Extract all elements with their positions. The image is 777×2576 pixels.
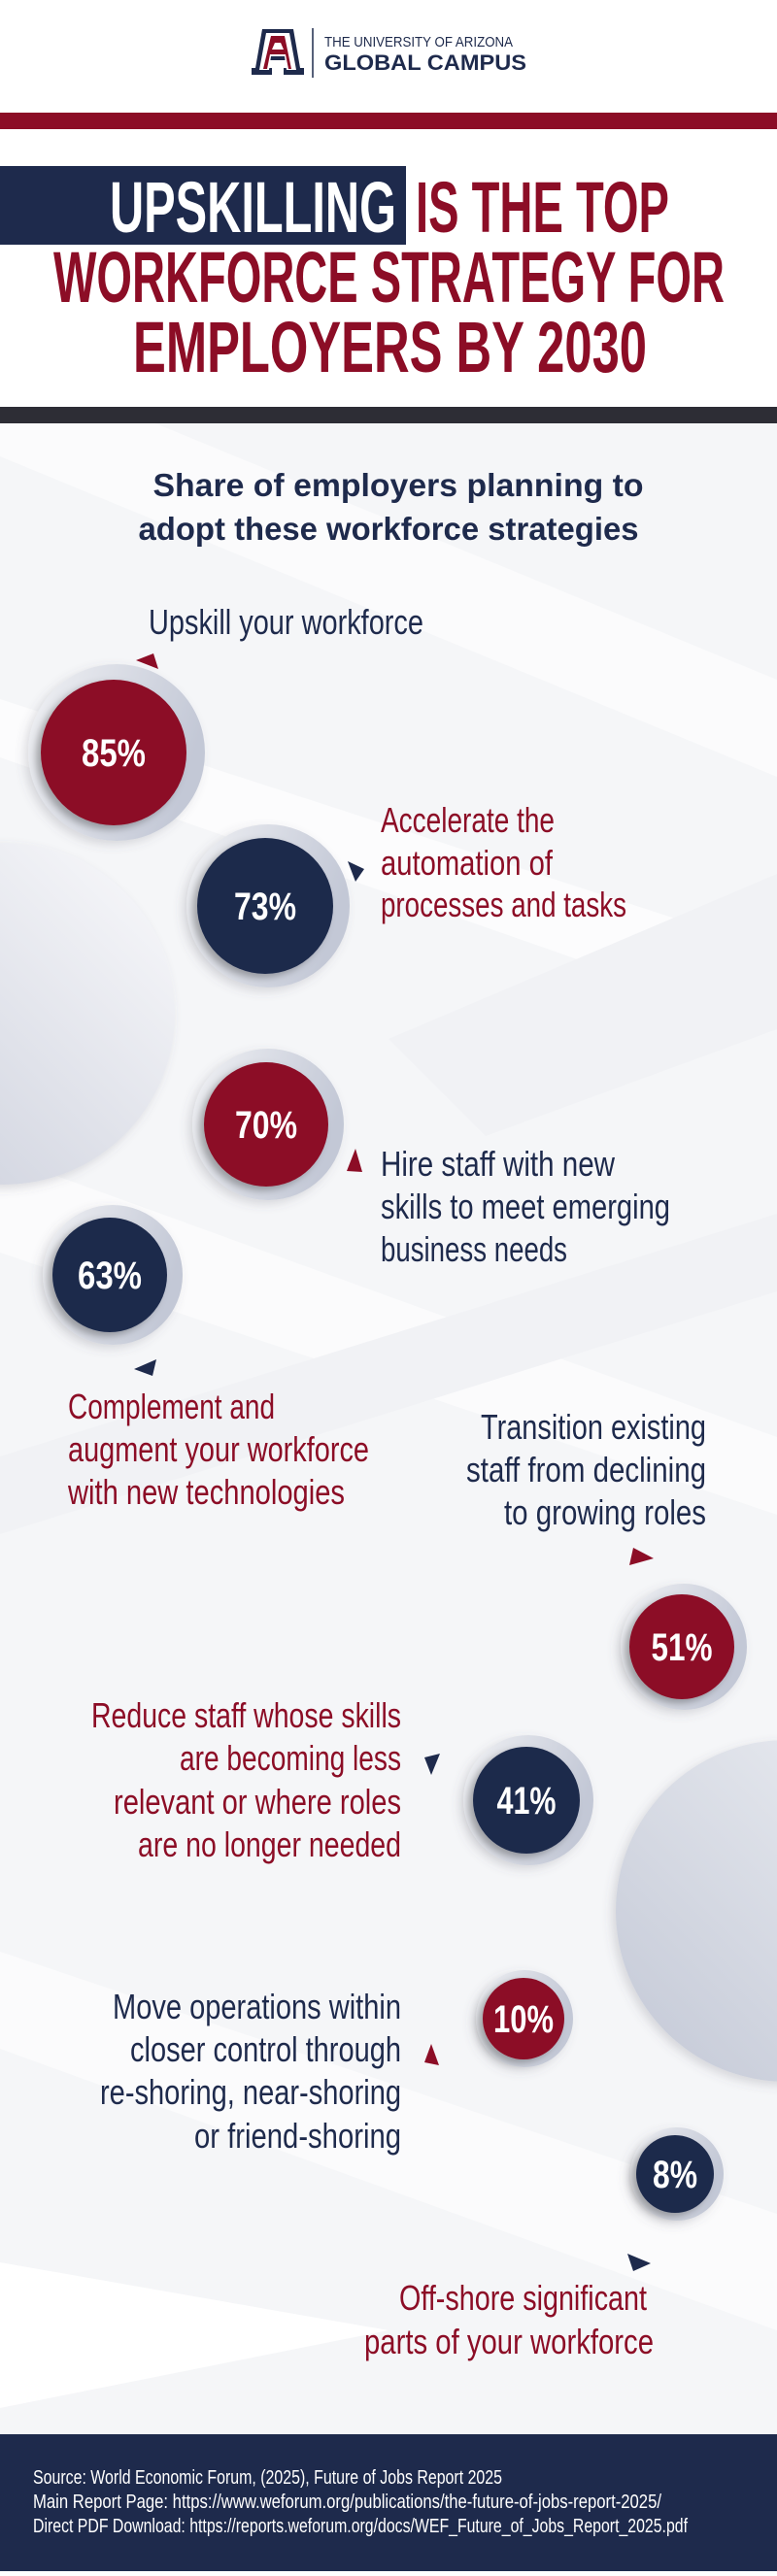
item: reshoring 10%: 10% xyxy=(493,1998,554,2041)
item: offshore 8%: Off-shore significant xyxy=(399,2278,647,2318)
footer sources: Main Report Page: https://www.weforum.org/publications/the-future-of-jobs-report-2025/ xyxy=(33,2492,661,2513)
item: transition 51%: staff from declining xyxy=(466,1450,706,1489)
title: UPSKILLING xyxy=(110,167,396,248)
item: reduce 41%: are becoming less xyxy=(180,1738,401,1778)
item: hire 70%: Hire staff with new xyxy=(381,1144,616,1184)
item: reduce 41%: 41% xyxy=(497,1780,556,1823)
logo text xyxy=(324,34,526,75)
footer sources xyxy=(0,2434,777,2571)
subtitle: Share of employers planning to xyxy=(153,467,643,503)
item: automation 73%: processes and tasks xyxy=(381,885,626,924)
subtitle: adopt these workforce strategies xyxy=(138,511,639,547)
item: reduce 41%: relevant or where roles xyxy=(114,1782,401,1822)
item: hire 70%: business needs xyxy=(381,1229,567,1269)
item: automation 73% xyxy=(186,800,626,987)
item: complement 63% xyxy=(43,1205,369,1512)
item: automation 73%: automation of xyxy=(381,843,554,883)
decorative big circles xyxy=(0,843,175,1185)
item: reshoring 10%: or friend-shoring xyxy=(194,2116,401,2156)
subtitle xyxy=(138,467,643,547)
item: hire 70% xyxy=(192,1049,670,1269)
footer sources: Source: World Economic Forum, (2025), Future of Jobs Report 2025 xyxy=(33,2467,502,2489)
title xyxy=(0,166,725,387)
logo text: THE UNIVERSITY OF ARIZONA xyxy=(324,34,513,50)
item: hire 70%: skills to meet emerging xyxy=(381,1187,670,1226)
logo text: GLOBAL CAMPUS xyxy=(324,50,526,75)
item: upskill 85%: Upskill your workforce xyxy=(149,602,423,642)
item: transition 51% xyxy=(466,1407,747,1710)
item: reduce 41%: are no longer needed xyxy=(138,1824,401,1864)
item: reduce 41% xyxy=(91,1695,593,1865)
item: offshore 8%: parts of your workforce xyxy=(364,2322,654,2361)
item: offshore 8%: 8% xyxy=(653,2154,697,2196)
item: offshore 8% xyxy=(364,2127,724,2361)
item: complement 63%: with new technologies xyxy=(67,1472,345,1512)
item: hire 70%: 70% xyxy=(235,1104,297,1147)
item: automation 73%: 73% xyxy=(234,886,296,928)
header logo xyxy=(252,28,526,78)
item: automation 73%: Accelerate the xyxy=(381,800,555,840)
item: reshoring 10%: Move operations within xyxy=(113,1987,401,2026)
item: transition 51%: to growing roles xyxy=(504,1492,706,1532)
item: complement 63%: augment your workforce xyxy=(68,1429,369,1469)
item: reshoring 10%: re-shoring, near-shoring xyxy=(100,2072,401,2112)
item: complement 63%: 63% xyxy=(78,1255,142,1297)
icon: block A xyxy=(252,29,304,75)
item: transition 51%: 51% xyxy=(651,1626,713,1669)
item: transition 51%: Transition existing xyxy=(481,1407,706,1447)
item: reduce 41%: Reduce staff whose skills xyxy=(91,1695,401,1735)
item: upskill 85% xyxy=(28,602,423,841)
background section xyxy=(0,423,777,2434)
item: reshoring 10% xyxy=(100,1970,573,2156)
item: upskill 85%: 85% xyxy=(82,732,146,775)
item: complement 63%: Complement and xyxy=(68,1387,275,1426)
item: reshoring 10%: closer control through xyxy=(130,2029,401,2069)
